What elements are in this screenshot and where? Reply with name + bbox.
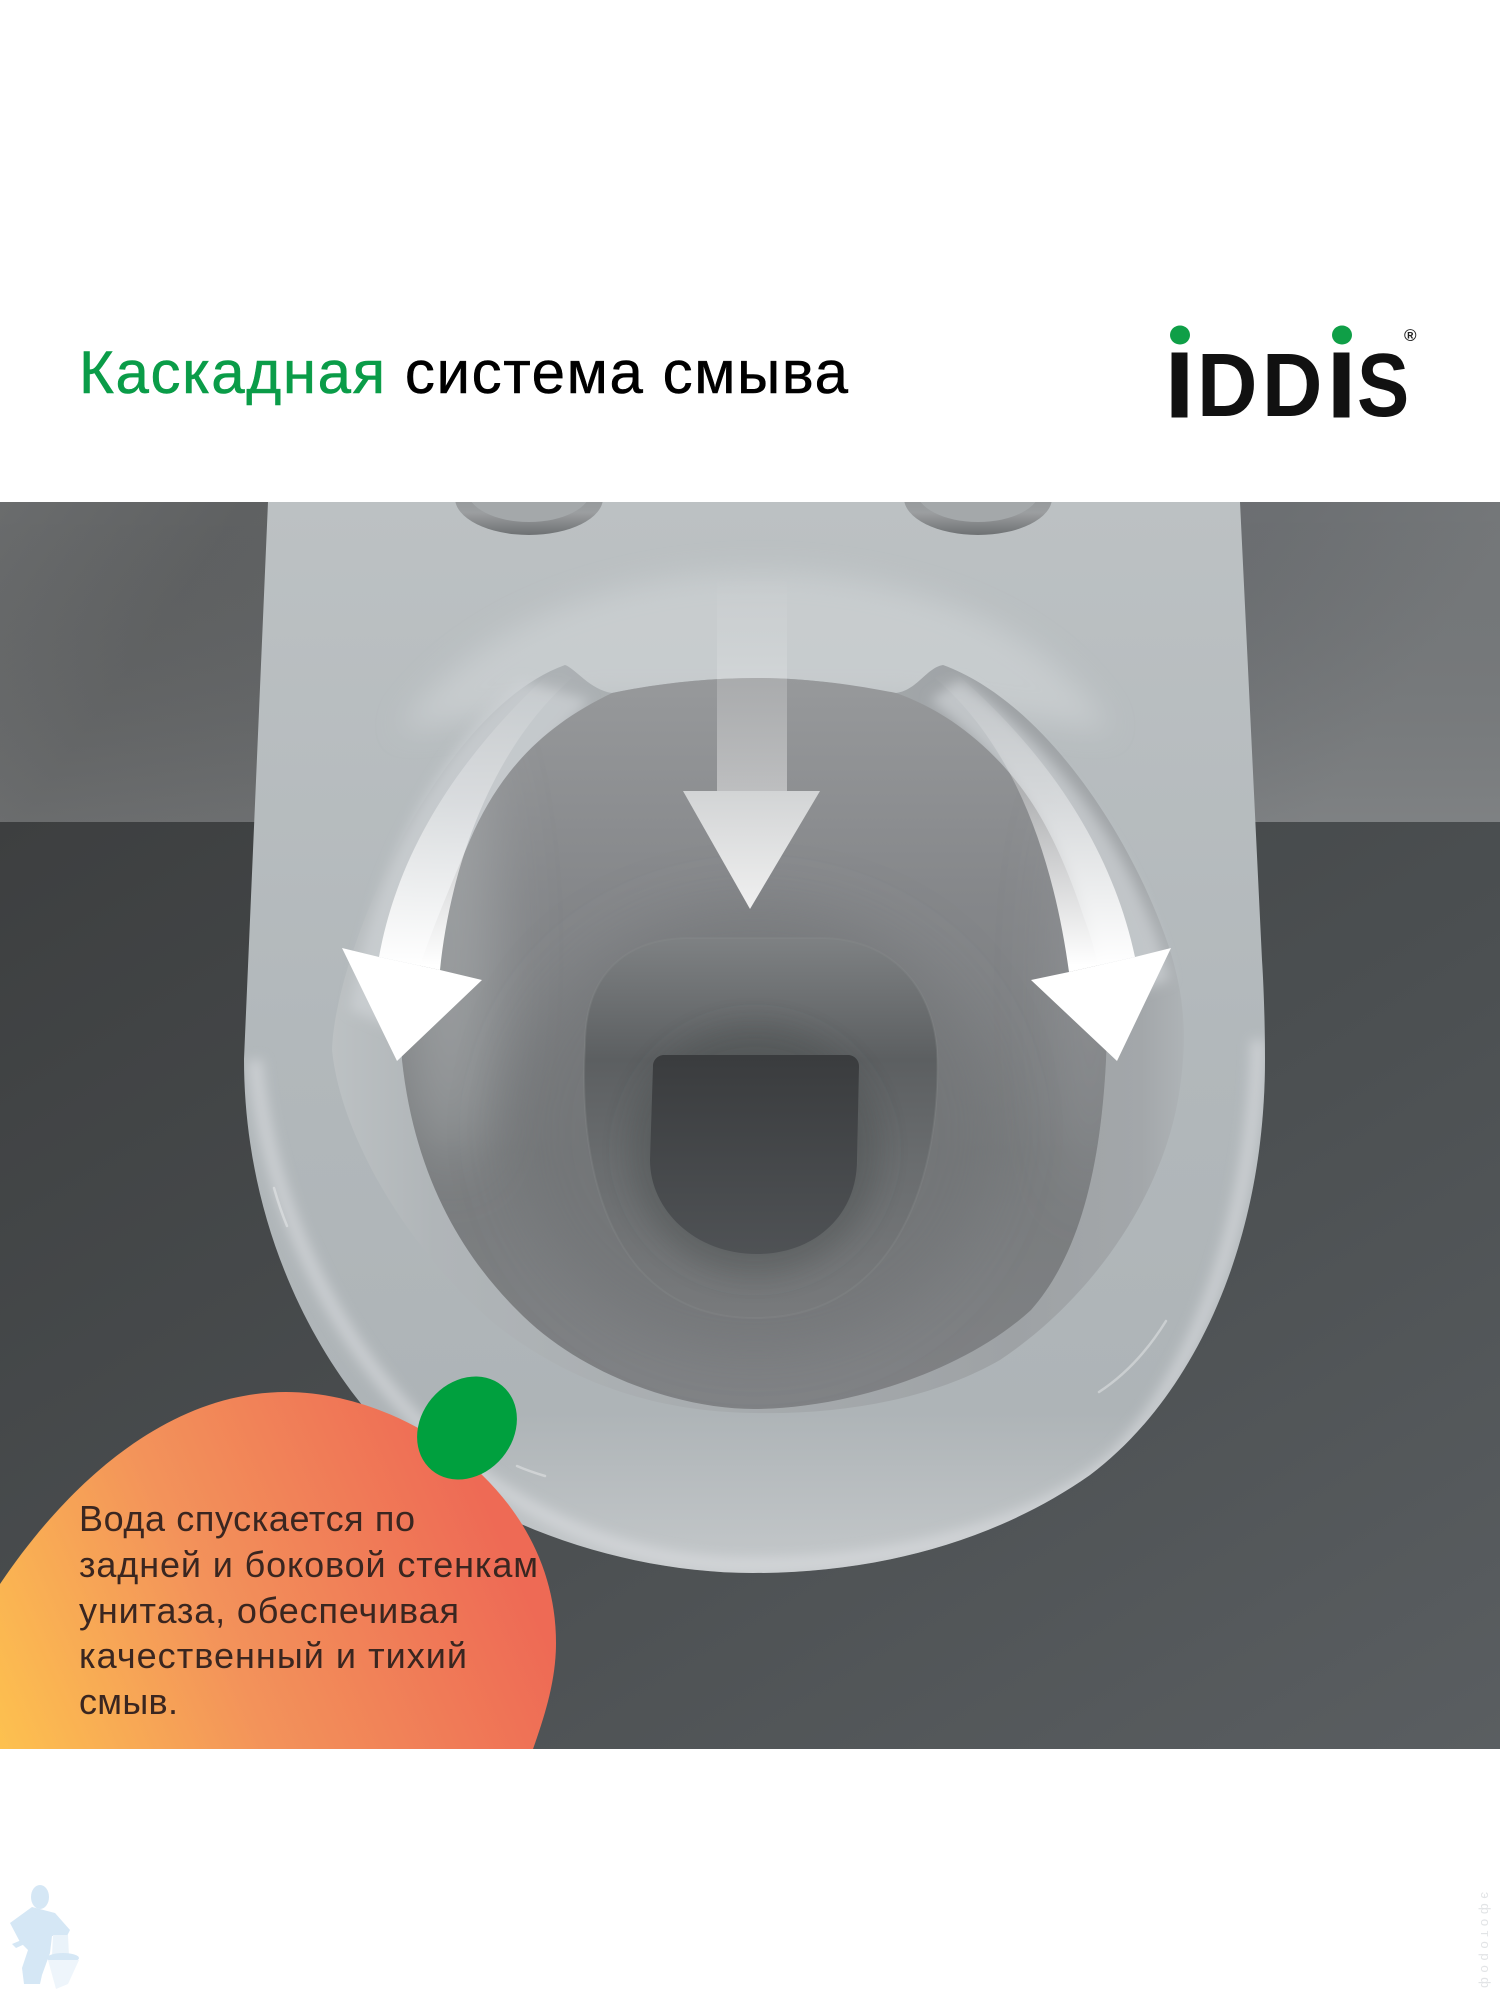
bowl soft shading <box>405 730 1120 1350</box>
water ring around drain <box>584 938 938 1193</box>
callout text: Вода спускается по <box>79 1498 415 1539</box>
logo wordmark: D <box>1197 335 1257 436</box>
rim shading and highlights <box>255 572 1258 1565</box>
photo: toilet bowl on grey background <box>0 458 1500 1749</box>
toilet body <box>244 502 1265 1573</box>
logo wordmark: D <box>1262 335 1322 436</box>
vertical watermark text: эфотороф <box>1478 1892 1493 1988</box>
logo wordmark: I <box>1329 336 1354 436</box>
callout text: задней и боковой стенкам <box>79 1544 538 1585</box>
seat mounting hole left <box>456 502 602 535</box>
title: Каскадная система смыва <box>79 339 849 406</box>
bowl interior <box>402 678 1106 1409</box>
rim wall top light <box>350 680 1170 1040</box>
logo dots <box>1170 326 1352 344</box>
callout text <box>79 1498 538 1722</box>
green accent dot <box>417 1376 517 1480</box>
drain hole shadow <box>630 1025 880 1275</box>
logo wordmark <box>1167 335 1409 436</box>
logo: IDDIS <box>1167 326 1417 436</box>
registered mark: ® <box>1404 326 1417 345</box>
logo wordmark: I <box>1167 336 1192 436</box>
seat mounting hole right <box>904 502 1052 535</box>
logo wordmark: S <box>1357 335 1409 435</box>
inner rim wall <box>332 665 1184 1413</box>
callout text: унитаза, обеспечивая <box>79 1590 459 1631</box>
orange callout shape <box>0 1392 556 1749</box>
arrow: left down <box>342 724 528 1061</box>
drain hole <box>650 1055 859 1254</box>
callout text: смыв. <box>79 1681 178 1722</box>
wall background <box>0 502 1500 823</box>
arrow: right down <box>977 714 1171 1061</box>
callout text: качественный и тихий <box>79 1635 467 1676</box>
floor background <box>0 822 1500 1749</box>
icon: plumber watermark <box>10 1885 79 1989</box>
arrow: centre down <box>683 666 820 909</box>
